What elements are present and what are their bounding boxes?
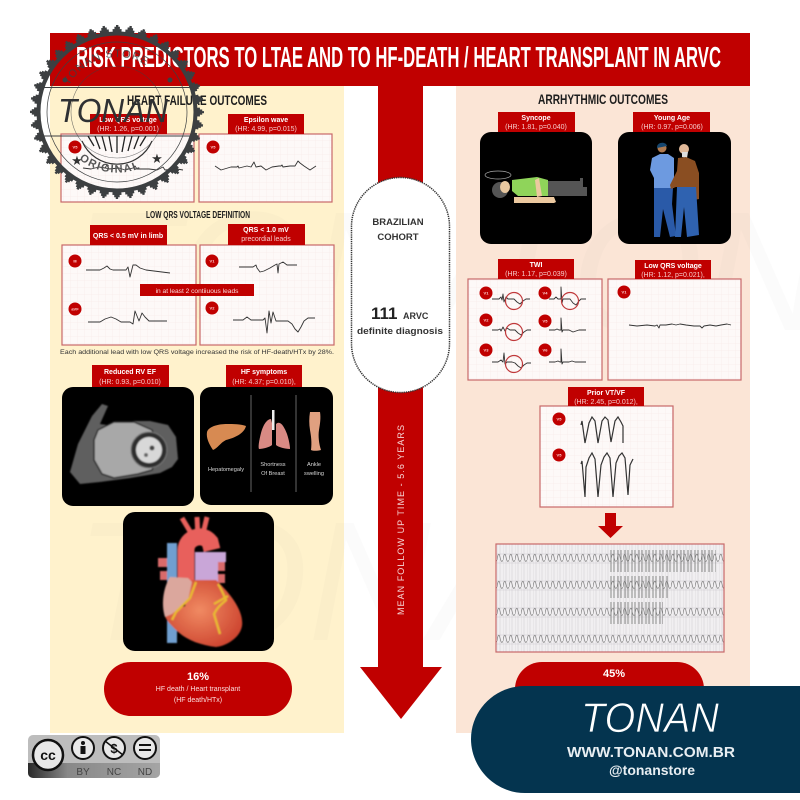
note: Each additional lead with low QRS voltage increased the risk of HF-death/HTx by 28%.	[60, 349, 334, 356]
reduced RV EF card: (HR: 0.93, p=0.010)	[99, 379, 161, 386]
low QRS voltage card	[608, 260, 741, 380]
result pill: 16%	[104, 662, 292, 716]
HF symptoms card	[200, 365, 333, 505]
precordial leads card: V2	[210, 306, 215, 310]
icon: ankle	[309, 412, 321, 451]
limb leads card	[62, 225, 196, 345]
precordial leads card: precordial leads	[241, 236, 291, 243]
heading: heart failure outcomes: HEART FAILURE OUTCOMES	[127, 92, 267, 108]
young age card: (HR: 0.97, p=0.006)	[641, 124, 703, 131]
TWI card: V1	[484, 290, 489, 296]
icon: fainted person	[485, 171, 587, 203]
license badge: NC	[107, 767, 121, 778]
panel: heart failure outcomes	[50, 86, 667, 733]
license badge: cc	[40, 747, 56, 763]
result pill: 16%: 16%	[187, 671, 209, 683]
HF symptoms card: Of Breast	[261, 471, 285, 477]
cohort pill: 111	[371, 304, 398, 323]
heading: arrhythmic outcomes: ARRHYTHMIC OUTCOMES	[538, 91, 668, 107]
precordial leads card: QRS < 1.0 mV	[243, 227, 289, 234]
cohort pill: ARVC	[403, 311, 429, 321]
prior VT/VF card: V5	[557, 416, 562, 422]
icon: two people	[650, 143, 699, 237]
license badge: $	[110, 741, 118, 756]
cohort pill: COHORT	[377, 232, 419, 243]
heart illustration	[123, 512, 274, 651]
cohort pill	[352, 178, 450, 392]
HF symptoms card: swelling	[304, 471, 324, 477]
ECG strip	[496, 544, 724, 652]
HF symptoms card: Hepatomegaly	[208, 467, 244, 473]
stamp top text: TONAN STORE	[62, 49, 149, 83]
result pill: 45%	[515, 662, 704, 716]
arrow: to ECG	[598, 513, 623, 538]
prior VT/VF card	[540, 387, 673, 507]
TWI card	[468, 259, 602, 380]
heading: low QRS voltage definition: LOW QRS VOLTAGE DEFINITION	[146, 210, 250, 221]
website: WWW.TONAN.COM.BR	[567, 745, 736, 761]
TWI card: V6	[543, 348, 548, 352]
epsilon wave card: V5	[211, 144, 216, 150]
icon: lungs	[259, 410, 290, 449]
HF symptoms card: Shortness	[260, 462, 286, 468]
handle: @tonanstore	[609, 762, 695, 778]
low voltage card: (HR: 1.26, p=0.001)	[97, 126, 159, 133]
stamp bottom text: ORIGINAL	[80, 154, 140, 173]
TWI card: TWI	[530, 262, 542, 269]
panel: arrhythmic outcomes	[456, 86, 800, 733]
cohort pill: definite diagnosis	[357, 326, 443, 337]
license badge	[28, 735, 160, 778]
reduced RV EF card	[62, 365, 194, 506]
TWI card: V4	[543, 290, 548, 296]
HF symptoms card: HF symptoms	[241, 369, 287, 376]
prior VT/VF card: V5	[557, 452, 562, 458]
young age card: Young Age	[654, 115, 690, 122]
result pill: 16%: HF death / Heart transplant	[156, 686, 240, 693]
HF symptoms card: Ankle	[307, 462, 321, 468]
license badge: BY	[76, 767, 90, 778]
syncope card: Syncope	[521, 115, 551, 122]
cohort pill: BRAZILIAN	[372, 217, 424, 228]
brand banner	[471, 686, 800, 793]
prior VT/VF card: (HR: 2.45, p=0.012),	[574, 399, 638, 406]
syncope card	[480, 112, 592, 244]
header bar	[50, 33, 750, 86]
result pill: 45%: 45%	[603, 668, 625, 680]
TWI card: V5	[543, 318, 548, 324]
brand logo: TONAN	[581, 694, 720, 741]
callout: contiguous leads	[140, 284, 254, 296]
stamp stars: ★	[71, 153, 83, 168]
young age card	[618, 112, 731, 244]
limb leads card: III	[73, 258, 77, 264]
epsilon wave card	[199, 114, 332, 202]
prior VT/VF card: Prior VT/VF	[587, 390, 626, 397]
cardiac MRI image	[70, 404, 178, 484]
low QRS voltage card: (HR: 1.12, p=0.021),	[641, 272, 705, 279]
TWI card: V2	[484, 318, 489, 322]
epsilon wave card: (HR: 4.99, p=0.015)	[235, 126, 297, 133]
low QRS voltage card: Low QRS voltage	[644, 263, 702, 270]
stamp: Tonan original	[30, 25, 204, 199]
epsilon wave card: Epsilon wave	[244, 117, 288, 124]
stamp signature: TONAN	[58, 92, 168, 129]
syncope card: (HR: 1.81, p=0.040)	[505, 124, 567, 131]
second stamp star: ★	[151, 151, 163, 166]
TWI card: (HR: 1.17, p=0.039)	[505, 271, 567, 278]
low voltage card: V5	[73, 144, 78, 150]
precordial leads card: V1	[210, 258, 215, 264]
limb leads card: aVF	[71, 306, 79, 312]
panel: heart failure outcomes: TONAN	[75, 487, 667, 677]
limb leads card: QRS < 0.5 mV in limb	[93, 233, 163, 240]
precordial leads card	[200, 224, 334, 345]
central arrow: mean follow up time	[360, 86, 442, 719]
low voltage card: Low QRS voltage	[99, 117, 157, 124]
reduced RV EF card: Reduced RV EF	[104, 369, 157, 376]
low voltage card	[61, 114, 194, 202]
license badge: ND	[138, 767, 152, 778]
HF symptoms card: (HR: 4.37; p=0.010),	[232, 379, 296, 386]
result pill: 16%: (HF death/HTx)	[174, 697, 222, 704]
icon: liver	[207, 424, 246, 450]
low QRS voltage card: V1	[622, 290, 627, 294]
follow up label: MEAN FOLLOW UP TIME - 5.6 YEARS	[396, 425, 406, 615]
panel: heart failure outcomes: TONAN	[75, 177, 667, 367]
callout: contiguous leads: in at least 2 contiiuous leads	[156, 288, 239, 295]
TWI card: V3	[484, 348, 489, 352]
